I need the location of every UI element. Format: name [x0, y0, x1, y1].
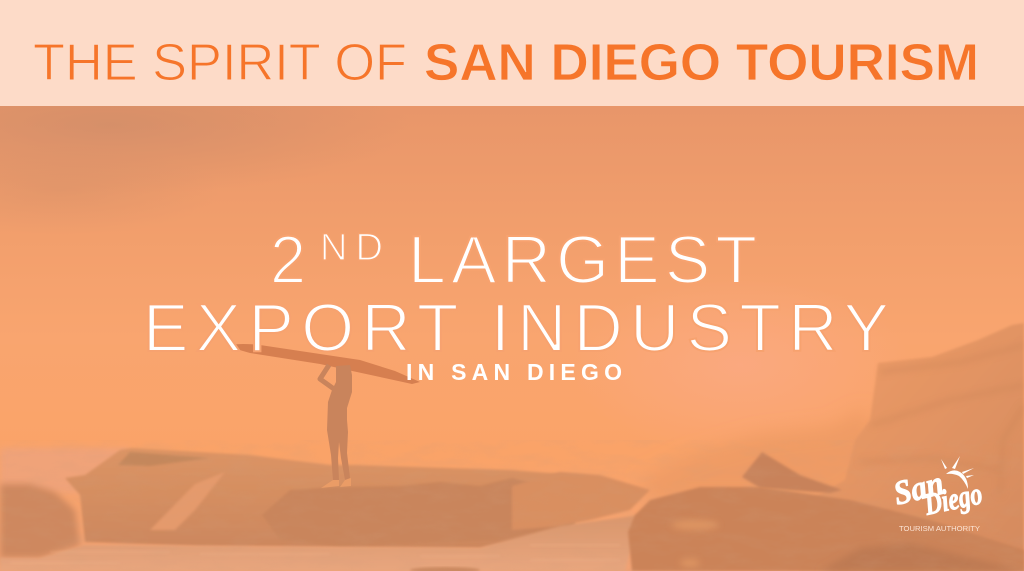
logo: San Diego Tourism Authority	[890, 456, 985, 533]
main rock mass under the surfer	[65, 448, 585, 548]
far left rocks	[0, 484, 80, 558]
mid rock ledge	[742, 452, 842, 493]
sea horizon on the left	[0, 448, 130, 493]
line 1: 2nd largest: LARGEST	[408, 222, 757, 298]
logo wordmark	[890, 465, 985, 522]
cliff strata	[860, 345, 1024, 495]
right-of-centre low rocks	[512, 472, 650, 530]
rock light facets	[150, 472, 225, 530]
header band	[0, 0, 1024, 106]
large foreground boulder	[628, 487, 1024, 571]
title	[33, 34, 979, 92]
texture overlay on rocks	[0, 440, 1024, 571]
surfer head and torso	[327, 365, 352, 480]
surfboard	[232, 344, 420, 384]
logo wordmark: Diego	[920, 476, 985, 522]
surfer raised arm	[320, 365, 334, 389]
boulder lichen highlights	[671, 520, 719, 567]
logo tagline: TOURISM AUTHORITY	[899, 524, 980, 533]
surfer silhouette	[320, 365, 352, 480]
right cliff	[800, 323, 1024, 571]
line 1: 2nd largest: ND	[320, 227, 383, 269]
boulder shadow right	[820, 543, 1024, 571]
water ripples	[10, 545, 620, 563]
distant headland	[640, 410, 880, 500]
headline	[143, 222, 889, 366]
surfer feet	[321, 478, 351, 488]
water foreground	[0, 515, 640, 571]
title: SAN DIEGO TOURISM	[424, 34, 979, 92]
bottom rock	[410, 567, 480, 571]
rock dark cap	[118, 452, 210, 466]
line 2: export industry: EXPORT INDUSTRY	[143, 290, 889, 366]
icon: sun rays	[941, 456, 974, 489]
darker foreground rock	[262, 478, 575, 546]
logo wordmark: San	[890, 465, 947, 513]
title: THE SPIRIT OF	[33, 34, 407, 92]
subhead: IN SAN DIEGO	[406, 359, 622, 385]
line 1: 2nd largest: 2	[270, 222, 306, 298]
